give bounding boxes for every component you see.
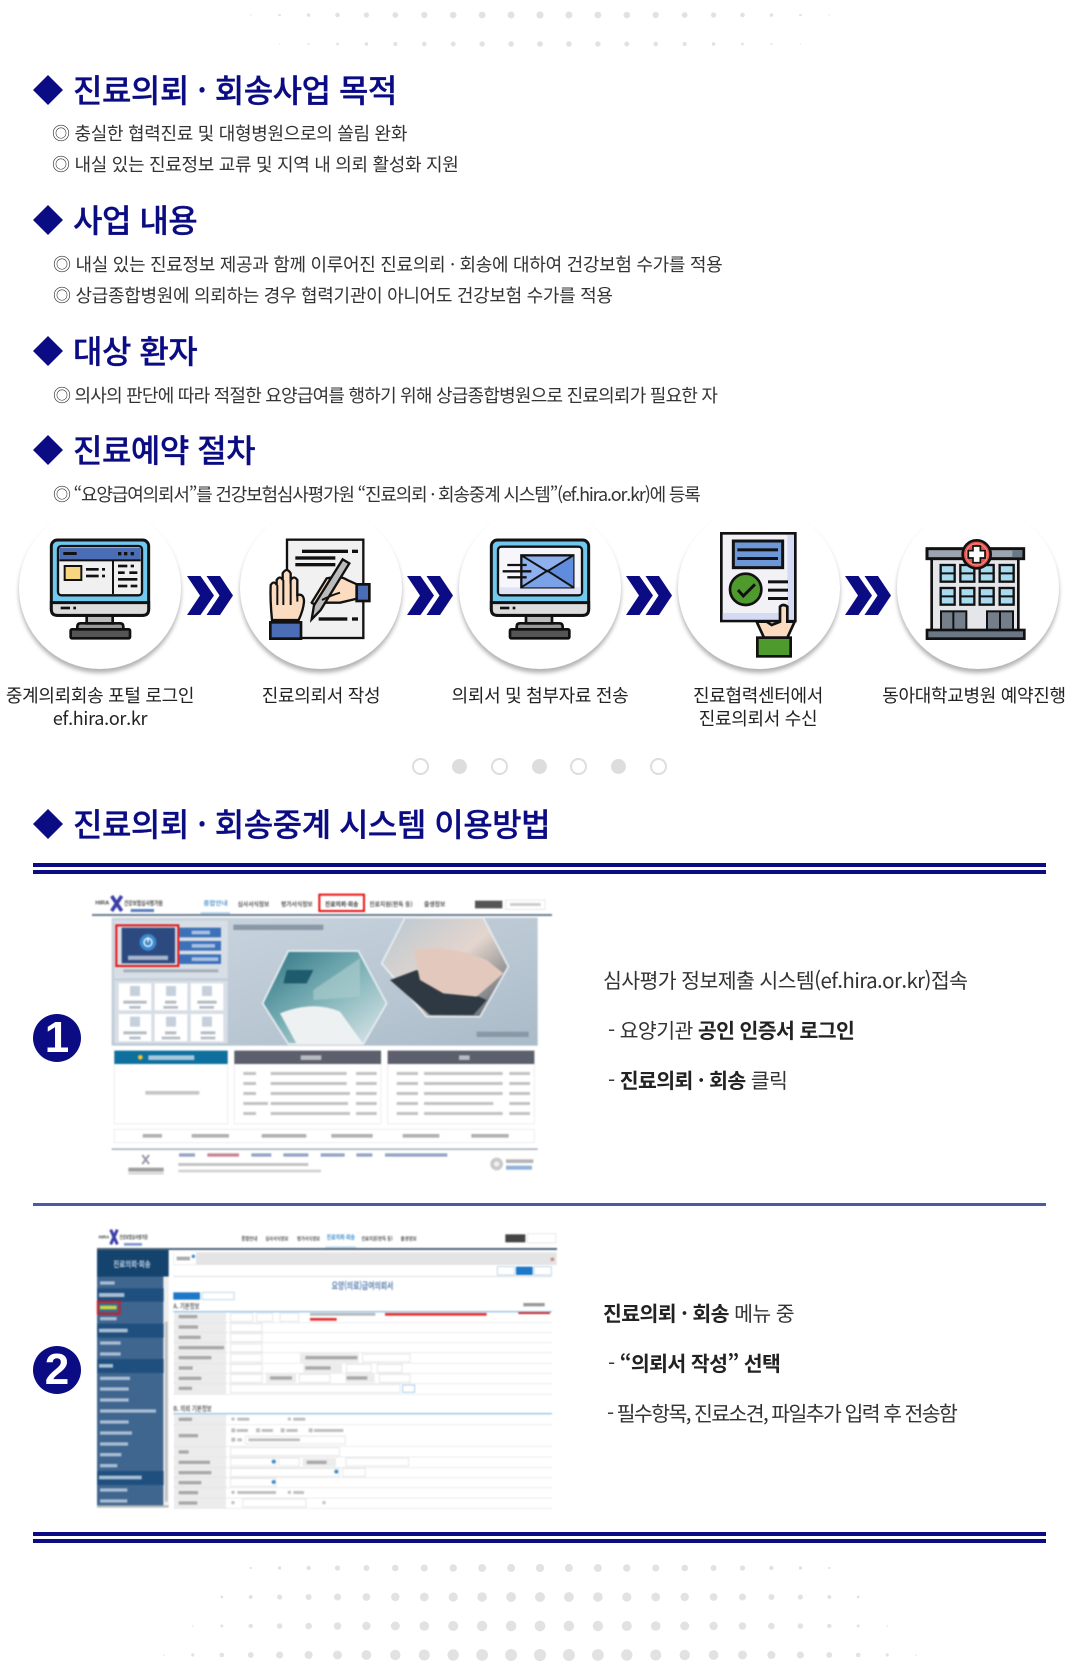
screenshot: HIRA e-Form main page: 건강보험심사평가원: [124, 898, 163, 907]
text: 진료의뢰 · 회송중계 시스템 이용방법: [73, 800, 550, 846]
text: step 2 description: - 필수항목, 진료소견, 파일추가 입력 후 전송함: [607, 1397, 956, 1427]
text: step 1 description: 심사평가 정보제출 시스템(ef.hira.or.kr)접속: [603, 964, 967, 994]
step label 4: 진료협력센터에서: [693, 682, 823, 708]
heading: 사업 내용: [33, 196, 197, 242]
screenshot: 요양(의료)급여의뢰서 form: 평가서식정보: [297, 1234, 320, 1242]
screenshot: HIRA e-Form main page: 종합안내: [203, 899, 228, 908]
arrow: step 2 to 3: [407, 576, 453, 615]
screenshot: 요양(의료)급여의뢰서 form: HIRA: [99, 1234, 110, 1239]
arrow: step 4 to 5: [845, 576, 891, 615]
text: 목적 2: ◎ 내실 있는 진료정보 교류 및 지역 내 의뢰 활성화 지원: [52, 151, 459, 177]
text: step 2 description: 진료의뢰 · 회송 메뉴 중: [603, 1297, 794, 1327]
screenshot: HIRA e-Form main page: 심사서식정보: [238, 899, 270, 908]
heading: 진료의뢰 회송사업 목적: [33, 66, 397, 112]
screenshot: 요양(의료)급여의뢰서 form: 심사서식정보: [265, 1234, 288, 1242]
screenshot: 요양(의료)급여의뢰서 form: 출생정보: [401, 1234, 417, 1242]
step label 3: 의뢰서 및 첨부자료 전송: [452, 682, 628, 708]
step circle 4: [678, 507, 840, 669]
step label 5: 동아대학교병원 예약진행: [882, 682, 1066, 708]
text: 대상 환자 설명: ◎ 의사의 판단에 따라 적절한 요양급여를 행하기 위해 상급종합병원으로 진료의뢰가 필요한 자: [53, 382, 717, 408]
screenshot: 요양(의료)급여의뢰서 form: 진료의뢰·회송: [327, 1233, 355, 1242]
badge 1: [33, 1014, 81, 1062]
pagination dots: [412, 758, 667, 775]
text: 절차 설명: ◎ “요양급여의뢰서”를 건강보험심사평가원 “진료의뢰 · 회송중계 시스템”(ef.hira.or.kr)에 등록: [53, 481, 700, 507]
text: step 2 description: - “의뢰서 작성” 선택: [608, 1347, 780, 1377]
heading: 진료예약 절차: [33, 426, 255, 472]
screenshot: 요양(의료)급여의뢰서 form: 건강보험심사평가원: [119, 1233, 148, 1241]
step label 4: [693, 682, 823, 730]
text: step 1 description: [603, 964, 967, 1094]
text: 목적 1: ◎ 충실한 협력진료 및 대형병원으로의 쏠림 완화: [52, 120, 407, 146]
badge 2: [33, 1346, 81, 1394]
badge 1: 1: [45, 1013, 69, 1062]
text: 대상 환자: [73, 327, 197, 373]
arrow: step 1 to 2: [187, 576, 233, 615]
step label 4: 진료의뢰서 수신: [699, 704, 817, 730]
text: 진료의뢰 · 회송사업 목적: [73, 66, 397, 112]
screenshot: HIRA e-Form main page: 진료지원(판독 등): [369, 899, 413, 908]
screenshot: HIRA e-Form main page: 평가서식정보: [281, 899, 313, 908]
screenshot: 요양(의료)급여의뢰서 form: A. 기본정보: [173, 1301, 199, 1311]
step circle 5: [897, 507, 1059, 669]
step circle 2: [240, 507, 402, 669]
screenshot: 요양(의료)급여의뢰서 form: 종합안내: [241, 1234, 257, 1242]
text: 사업 내용 1: ◎ 내실 있는 진료정보 제공과 함께 이루어진 진료의뢰 · 회송에 대하여 건강보험 수가를 적용: [53, 251, 722, 277]
screenshot: HIRA e-Form main page: HIRA: [95, 901, 109, 907]
step label 1: 중계의뢰회송 포털 로그인: [6, 682, 194, 708]
heading: 이용방법: [33, 800, 550, 846]
step label 1: [6, 682, 194, 730]
text: step 2 description: [603, 1297, 958, 1427]
text: step 1 description: - 진료의뢰 · 회송 클릭: [608, 1064, 787, 1094]
arrow: step 3 to 4: [626, 576, 672, 615]
icon: monitor with envelope: [490, 538, 590, 640]
text: step 1 description: - 요양기관 공인 인증서 로그인: [608, 1014, 854, 1044]
screenshot: 요양(의료)급여의뢰서 form: 요양(의료)급여의뢰서: [332, 1278, 393, 1292]
screenshot: 요양(의료)급여의뢰서 form: 진료의뢰·회송: [113, 1259, 151, 1270]
heading: 대상 환자: [33, 327, 198, 373]
screenshot: HIRA e-Form main page: 출생정보: [424, 899, 446, 908]
screenshot: HIRA e-Form main page: 진료의뢰·회송: [325, 899, 359, 908]
screenshot: 요양(의료)급여의뢰서 form: 진료지원(판독 등): [361, 1234, 393, 1242]
icon: hands writing referral document: [269, 538, 371, 640]
text: 진료예약 절차: [73, 426, 255, 472]
step circle 1: [19, 507, 181, 669]
text: 사업 내용 2: ◎ 상급종합병원에 의뢰하는 경우 협력기관이 아니어도 건강보험 수가를 적용: [53, 282, 613, 308]
step label 2: 진료의뢰서 작성: [262, 682, 380, 708]
screenshot: HIRA e-Form main page: [91, 892, 553, 1175]
step label 1: ef.hira.or.kr: [53, 704, 147, 730]
icon: monitor with portal page: [50, 538, 150, 640]
icon: certificate with check mark held by hand: [720, 532, 797, 658]
screenshot: 요양(의료)급여의뢰서 form: B. 의뢰 기본정보: [173, 1403, 212, 1413]
screenshot: 요양(의료)급여의뢰서 form: [96, 1228, 558, 1509]
text: 사업 내용: [73, 196, 197, 242]
icon: hospital building: [926, 539, 1026, 640]
step circle 3: [459, 507, 621, 669]
badge 2: 2: [45, 1345, 69, 1394]
